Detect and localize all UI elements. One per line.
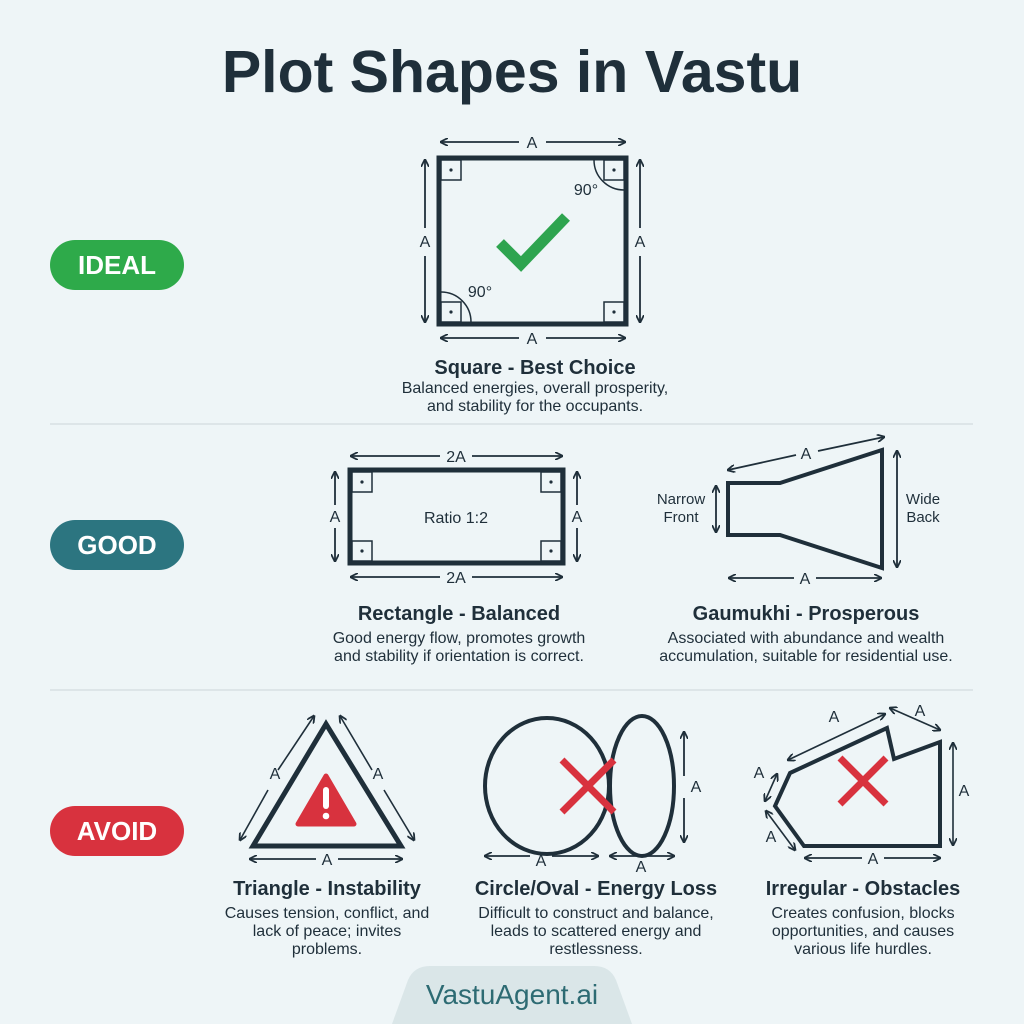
- irregular text: opportunities, and causes: [772, 923, 954, 940]
- square diagram: A: [420, 234, 431, 251]
- rectangle text: Good energy flow, promotes growth: [333, 630, 585, 647]
- triangle diagram: [240, 716, 414, 869]
- gaumukhi diagram: A: [801, 446, 812, 463]
- circle text: Difficult to construct and balance,: [478, 905, 714, 922]
- rectangle diagram: 2A: [446, 449, 466, 466]
- irregular diagram: A: [868, 851, 879, 868]
- pill: IDEAL: [50, 240, 184, 290]
- irregular diagram: A: [754, 765, 765, 782]
- circle/oval diagram: A: [536, 853, 547, 870]
- square text: Square - Best Choice: [434, 357, 636, 379]
- irregular diagram: A: [829, 709, 840, 726]
- circle text: restlessness.: [549, 941, 643, 958]
- square diagram: A: [527, 135, 538, 152]
- irregular text: Irregular - Obstacles: [766, 878, 960, 900]
- irregular diagram: A: [766, 829, 777, 846]
- triangle diagram: A: [322, 852, 333, 869]
- square diagram: A: [527, 331, 538, 348]
- triangle text: Causes tension, conflict, and: [225, 905, 429, 922]
- irregular text: various life hurdles.: [794, 941, 932, 958]
- triangle text: [225, 878, 429, 958]
- circle/oval diagram: A: [691, 779, 702, 796]
- rectangle text: [333, 603, 585, 665]
- gaumukhi text: [659, 603, 953, 665]
- triangle text: lack of peace; invites: [253, 923, 401, 940]
- rectangle text: Rectangle - Balanced: [358, 603, 560, 625]
- circle text: [475, 878, 717, 958]
- icon: warning: [298, 776, 354, 824]
- gaumukhi diagram: Narrow: [657, 491, 705, 508]
- gaumukhi diagram: [657, 437, 940, 588]
- irregular diagram: A: [915, 703, 926, 720]
- circle text: Circle/Oval - Energy Loss: [475, 878, 717, 900]
- square text: Balanced energies, overall prosperity,: [402, 380, 668, 397]
- rectangle diagram: A: [330, 509, 341, 526]
- rectangle diagram: A: [572, 509, 583, 526]
- gaumukhi text: Associated with abundance and wealth: [668, 630, 944, 647]
- pill: GOOD: [50, 520, 184, 570]
- triangle text: problems.: [292, 941, 362, 958]
- square diagram: A: [635, 234, 646, 251]
- triangle diagram: A: [373, 766, 384, 783]
- square diagram: [420, 135, 646, 348]
- pill: AVOID: AVOID: [77, 816, 157, 846]
- pill: IDEAL: IDEAL: [78, 250, 156, 280]
- gaumukhi text: Gaumukhi - Prosperous: [693, 603, 919, 625]
- gaumukhi diagram: A: [800, 571, 811, 588]
- square diagram: 90°: [574, 182, 598, 199]
- gaumukhi text: accumulation, suitable for residential use.: [659, 648, 953, 665]
- gaumukhi diagram: Back: [906, 509, 940, 526]
- rectangle text: and stability if orientation is correct.: [334, 648, 584, 665]
- circle text: leads to scattered energy and: [491, 923, 701, 940]
- square text: and stability for the occupants.: [427, 398, 643, 415]
- triangle text: Triangle - Instability: [233, 878, 422, 900]
- irregular text: Creates confusion, blocks: [771, 905, 955, 922]
- rectangle diagram: 2A: [446, 570, 466, 587]
- circle/oval diagram: [485, 716, 702, 876]
- title: Plot Shapes in Vastu: [222, 39, 802, 105]
- square text: [402, 357, 668, 415]
- triangle diagram: A: [270, 766, 281, 783]
- square diagram: 90°: [468, 284, 492, 301]
- pill: GOOD: GOOD: [77, 530, 157, 560]
- irregular diagram: A: [959, 783, 970, 800]
- rectangle diagram: [330, 449, 583, 587]
- footer brand: VastuAgent.ai: [426, 979, 598, 1010]
- gaumukhi diagram: Wide: [906, 491, 940, 508]
- irregular text: [766, 878, 960, 958]
- rectangle diagram: Ratio 1:2: [424, 510, 488, 527]
- footer brand: [392, 966, 632, 1024]
- circle/oval diagram: A: [636, 859, 647, 876]
- pill: AVOID: [50, 806, 184, 856]
- irregular diagram: [754, 703, 970, 868]
- gaumukhi diagram: Front: [663, 509, 699, 526]
